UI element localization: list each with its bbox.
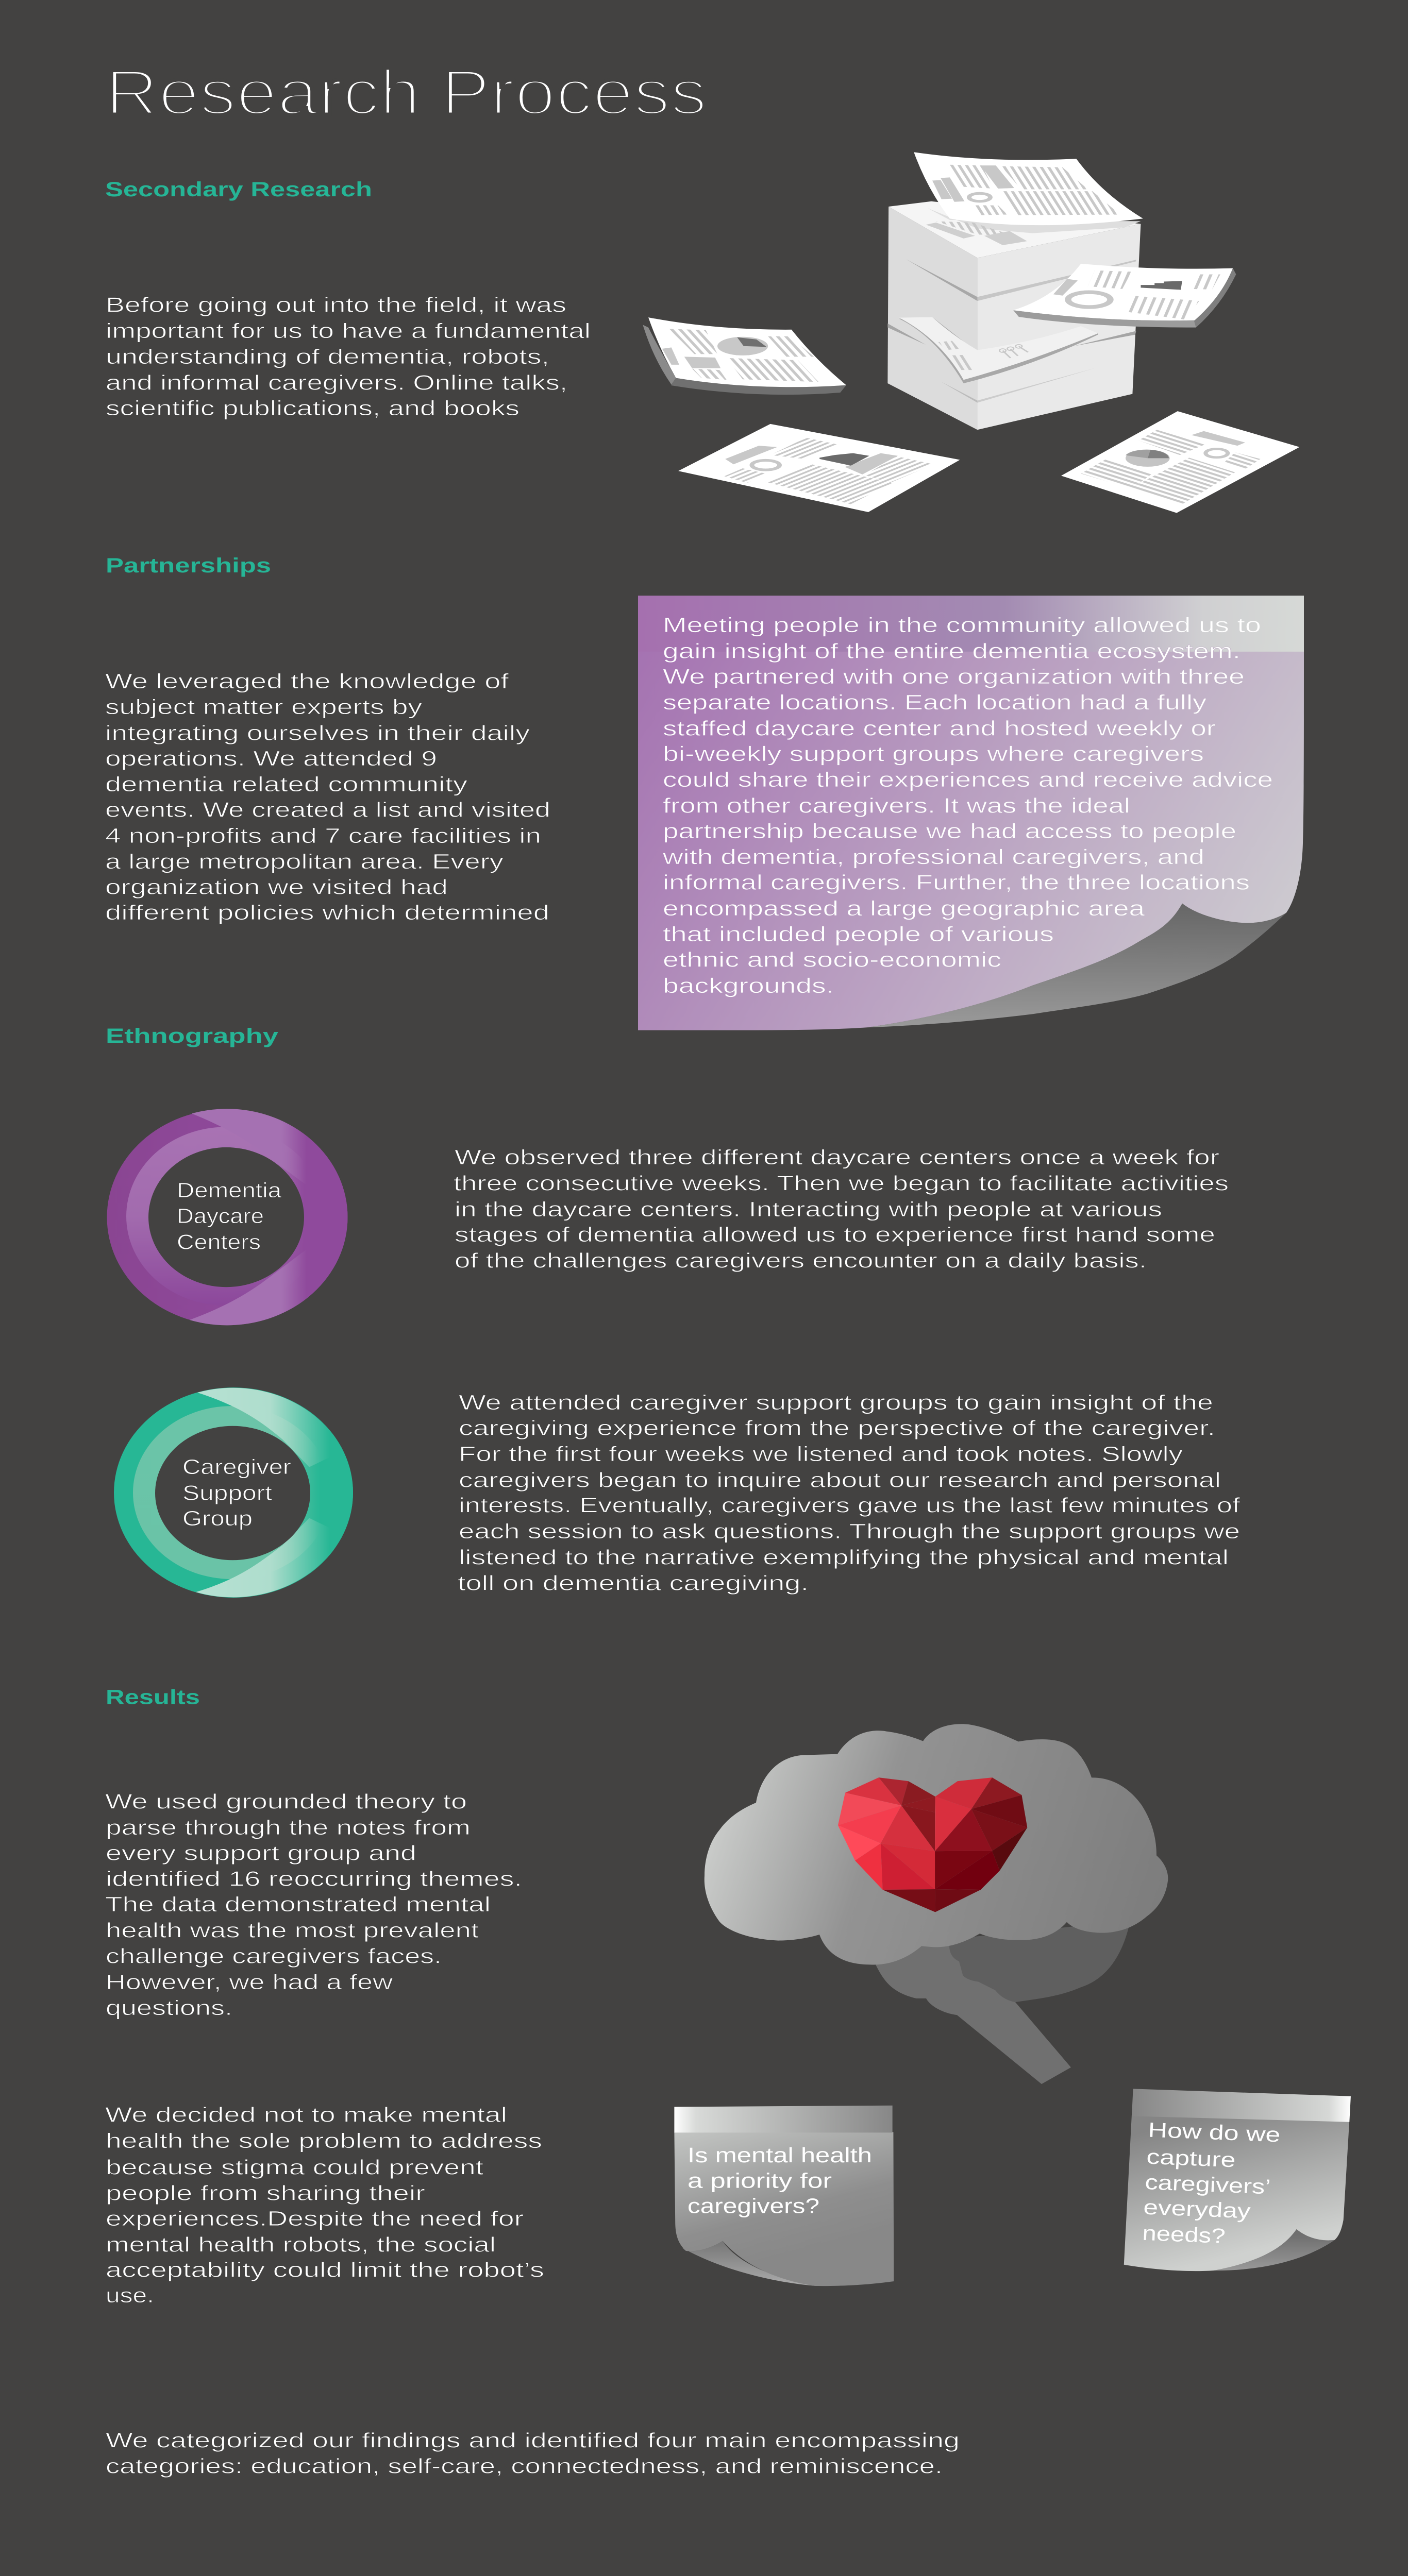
ring label: Daycare: [177, 1205, 264, 1228]
title: Research Process: [105, 56, 707, 128]
text block: conclusion: [106, 2429, 960, 2478]
heading: Ethnography: Ethnography: [106, 1024, 279, 1047]
text block: support groups: each session to ask questions. Through the support groups we: [459, 1520, 1240, 1543]
text block: mental health decision: experiences.Despite the need for: [106, 2207, 524, 2230]
ring label: Caregiver: [182, 1455, 291, 1479]
text block: daycare centers: We observed three different daycare centers once a week for: [455, 1146, 1219, 1170]
ring label: Centers: [177, 1231, 261, 1254]
text block: secondary research: Before going out into the field, it was: [106, 294, 566, 317]
floating sheet: left: [643, 317, 846, 395]
sticky note text: [662, 614, 1273, 997]
text block: mental health decision: mental health robots, the social: [106, 2233, 496, 2257]
text block: partnerships: operations. We attended 9: [105, 747, 437, 770]
text block: mental health decision: because stigma could prevent: [106, 2156, 483, 2179]
text block: secondary research: [106, 294, 591, 420]
ring label: [182, 1455, 291, 1530]
brain cloud: [705, 1724, 1168, 1964]
text block: mental health decision: use.: [106, 2284, 154, 2308]
text block: secondary research: understanding of dementia, robots,: [106, 345, 549, 369]
text block: daycare centers: in the daycare centers. Interacting with people at various: [455, 1198, 1162, 1221]
text block: support groups: [458, 1391, 1240, 1595]
text block: partnerships: events. We created a list and visited: [105, 799, 550, 822]
floating sheet: top: [914, 152, 1143, 225]
heading: Results: Results: [106, 1686, 200, 1708]
text block: partnerships: organization we visited had: [105, 876, 448, 899]
note text: needs?: [1142, 2222, 1226, 2248]
text block: support groups: listened to the narrative exemplifying the physical and mental: [459, 1546, 1229, 1569]
note text: capture: [1146, 2145, 1236, 2172]
panel: purple sticky note: [638, 596, 1304, 1030]
text block: grounded theory: However, we had a few: [106, 1971, 393, 1994]
text block: support groups: For the first four weeks we listened and took notes. Slowly: [459, 1443, 1183, 1466]
sticky note text: bi-weekly support groups where caregivers: [663, 742, 1204, 766]
sticky note text: informal caregivers. Further, the three locations: [663, 871, 1250, 894]
heading: Secondary Research: Secondary Research: [105, 178, 372, 200]
sticky note text: that included people of various: [663, 923, 1054, 946]
chart: purple ring Dementia Daycare Centers: [107, 1109, 347, 1325]
text block: conclusion: categories: education, self-care, connectedness, and reminiscence.: [106, 2455, 943, 2478]
illustration: stack of papers: [643, 152, 1299, 513]
text block: mental health decision: people from sharing their: [106, 2182, 425, 2205]
text block: partnerships: dementia related community: [105, 773, 468, 796]
text block: support groups: interests. Eventually, caregivers gave us the last few minutes of: [459, 1494, 1240, 1517]
text block: grounded theory: challenge caregivers faces.: [106, 1945, 442, 1968]
text block: daycare centers: [454, 1146, 1229, 1273]
sticky note body: [638, 648, 1304, 1030]
text block: partnerships: subject matter experts by: [105, 696, 423, 719]
note text: caregivers?: [688, 2195, 819, 2218]
sticky note curl shadow: [867, 904, 1286, 1027]
text block: support groups: toll on dementia caregiving.: [458, 1572, 809, 1595]
note text: [1142, 2119, 1281, 2248]
text block: support groups: We attended caregiver support groups to gain insight of the: [459, 1391, 1213, 1415]
text block: grounded theory: The data demonstrated mental: [105, 1893, 491, 1916]
illustration: brain with heart: [705, 1724, 1168, 2084]
text block: secondary research: and informal caregivers. Online talks,: [106, 371, 567, 395]
note shape: [1124, 2089, 1351, 2271]
ring label: Dementia: [177, 1179, 281, 1202]
text block: partnerships: We leveraged the knowledge of: [105, 670, 509, 693]
sticky note top band: [638, 596, 1304, 652]
text block: daycare centers: of the challenges caregivers encounter on a daily basis.: [455, 1249, 1147, 1273]
ring label: Group: [182, 1507, 253, 1530]
text block: grounded theory: [105, 1790, 522, 2020]
sticky note text: ethnic and socio-economic: [663, 948, 1001, 972]
sticky note text: backgrounds.: [663, 974, 834, 997]
text block: conclusion: We categorized our findings and identified four main encompassing: [106, 2429, 960, 2452]
text block: grounded theory: parse through the notes from: [106, 1816, 471, 1839]
text block: grounded theory: identified 16 reoccurring themes.: [106, 1868, 522, 1891]
sticky note text: We partnered with one organization with three: [663, 665, 1245, 688]
text block: grounded theory: health was the most prevalent: [106, 1919, 479, 1942]
sticky note: capturing needs question: [1124, 2089, 1351, 2271]
sticky note text: separate locations. Each location had a fully: [663, 691, 1207, 715]
text block: mental health decision: health the sole problem to address: [106, 2129, 542, 2153]
note text: everyday: [1143, 2196, 1251, 2223]
note text: How do we: [1148, 2119, 1281, 2147]
sticky note text: gain insight of the entire dementia ecosystem.: [663, 639, 1241, 663]
sticky note text: could share their experiences and receive advice: [663, 768, 1273, 792]
note text: caregivers’: [1145, 2171, 1271, 2199]
text block: daycare centers: stages of dementia allowed us to experience first hand some: [455, 1223, 1215, 1247]
text block: partnerships: different policies which determined: [105, 901, 549, 924]
text block: support groups: caregivers began to inquire about our research and personal: [459, 1468, 1221, 1492]
sticky note text: with dementia, professional caregivers, and: [662, 845, 1204, 869]
brain stem and cerebellum: [876, 1944, 1071, 2084]
text block: mental health decision: [105, 2104, 544, 2308]
text block: partnerships: integrating ourselves in their daily: [105, 721, 530, 745]
floating sheet: right: [1013, 264, 1236, 328]
ring label: Support: [182, 1482, 272, 1505]
text block: grounded theory: questions.: [106, 1996, 232, 2020]
text block: grounded theory: We used grounded theory to: [105, 1790, 467, 1814]
text block: mental health decision: We decided not to make mental: [105, 2104, 507, 2127]
sticky note text: Meeting people in the community allowed us to: [663, 614, 1261, 637]
sticky note text: partnership because we had access to people: [663, 820, 1236, 843]
text block: mental health decision: acceptability could limit the robot’s: [106, 2259, 544, 2282]
text block: support groups: caregiving experience from the perspective of the caregiver.: [459, 1417, 1215, 1440]
note text: [688, 2144, 872, 2218]
note text: Is mental health: [688, 2144, 872, 2167]
text block: partnerships: a large metropolitan area. Every: [105, 850, 504, 874]
sticky note text: from other caregivers. It was the ideal: [663, 794, 1130, 818]
low-poly heart: [838, 1777, 1027, 1912]
ring label: [177, 1179, 281, 1254]
chart: green ring Caregiver Support Group: [114, 1387, 353, 1598]
paper stack: [887, 201, 1141, 430]
sticky note: mental health question: [674, 2106, 894, 2286]
rear brain lobe: [949, 1921, 1130, 2002]
note text: a priority for: [688, 2169, 832, 2193]
sticky note text: staffed daycare center and hosted weekly or: [663, 717, 1216, 740]
text block: partnerships: 4 non-profits and 7 care facilities in: [105, 824, 541, 848]
text block: secondary research: important for us to have a fundamental: [106, 319, 591, 343]
text block: secondary research: scientific publications, and books: [106, 397, 519, 420]
note shape: [674, 2106, 894, 2286]
paper tucked into stack: [899, 317, 1098, 383]
text block: daycare centers: three consecutive weeks. Then we began to facilitate activities: [454, 1172, 1229, 1195]
flat sheet: bottom right: [1061, 411, 1299, 513]
text block: grounded theory: every support group and: [106, 1841, 416, 1865]
text block: partnerships: [105, 670, 550, 924]
flat sheet: bottom left: [678, 424, 960, 512]
heading: Partnerships: Partnerships: [106, 554, 271, 577]
sticky note text: encompassed a large geographic area: [663, 897, 1145, 920]
